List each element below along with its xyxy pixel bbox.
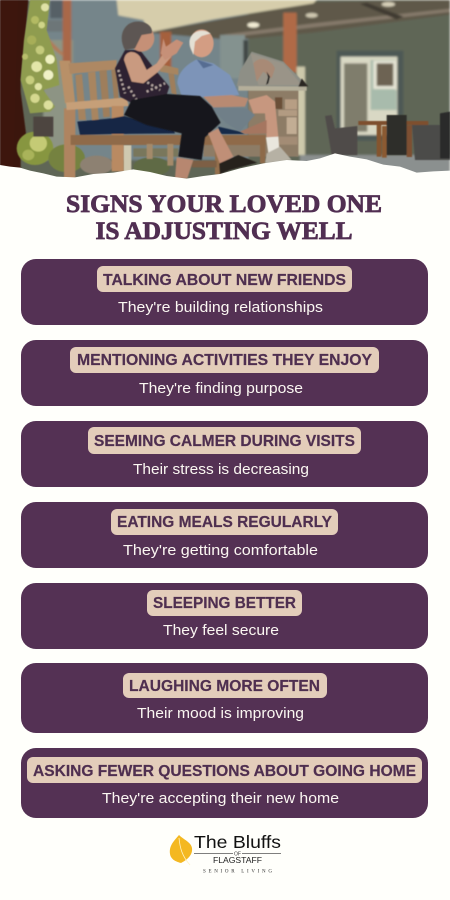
panel: talking about new friends [21, 259, 428, 325]
grill and stone base [203, 52, 308, 157]
background: building and patio [0, 0, 450, 180]
panel: sleeping better [21, 583, 428, 649]
panel: seeming calmer: SEEMING CALMER DURING VISITS [94, 433, 355, 450]
panel: seeming calmer: Their stress is decreasing [133, 461, 309, 478]
bench [59, 60, 266, 178]
panel: eating meals: They're getting comfortable [123, 542, 318, 559]
panel: asking fewer questions: ASKING FEWER QUESTIONS ABOUT GOING HOME [33, 763, 416, 780]
panel: eating meals: EATING MEALS REGULARLY [117, 514, 333, 531]
panel: asking fewer questions [21, 748, 428, 818]
logo: The Bluffs of Flagstaff [170, 832, 281, 874]
woman [115, 22, 257, 178]
panel: laughing more often [21, 663, 428, 733]
panel: mentioning activities: They're finding purpose [139, 380, 303, 397]
logo: The Bluffs of Flagstaff: The Bluffs [194, 832, 281, 852]
man [177, 29, 292, 163]
title: IS ADJUSTING WELL [96, 218, 352, 245]
logo: The Bluffs of Flagstaff: OF [234, 852, 241, 858]
foliage [17, 0, 178, 176]
panel: talking about new friends: TALKING ABOUT NEW FRIENDS [103, 272, 346, 289]
panel: mentioning activities [21, 340, 428, 406]
icon: aspen leaf [170, 835, 192, 865]
patio furniture [325, 112, 450, 160]
panel: seeming calmer [21, 421, 428, 487]
torn paper edge [0, 153, 450, 207]
left dark post [0, 0, 28, 170]
panel: mentioning activities: MENTIONING ACTIVITIES THEY ENJOY [77, 352, 373, 369]
photo: seniors on a bench [0, 0, 450, 207]
panel: laughing more often: LAUGHING MORE OFTEN [129, 678, 320, 695]
title: SIGNS YOUR LOVED ONE [66, 191, 382, 218]
panel: eating meals [21, 502, 428, 568]
panel: sleeping better: They feel secure [163, 622, 279, 639]
title [66, 191, 382, 245]
logo: The Bluffs of Flagstaff: SENIOR LIVING [203, 870, 272, 874]
logo: The Bluffs of Flagstaff: FLAGSTAFF [213, 856, 262, 865]
panel: sleeping better: SLEEPING BETTER [153, 595, 296, 612]
panel: asking fewer questions: They're accepting their new home [102, 790, 339, 807]
panel: talking about new friends: They're building relationships [118, 299, 323, 316]
panel: laughing more often: Their mood is improving [137, 705, 304, 722]
